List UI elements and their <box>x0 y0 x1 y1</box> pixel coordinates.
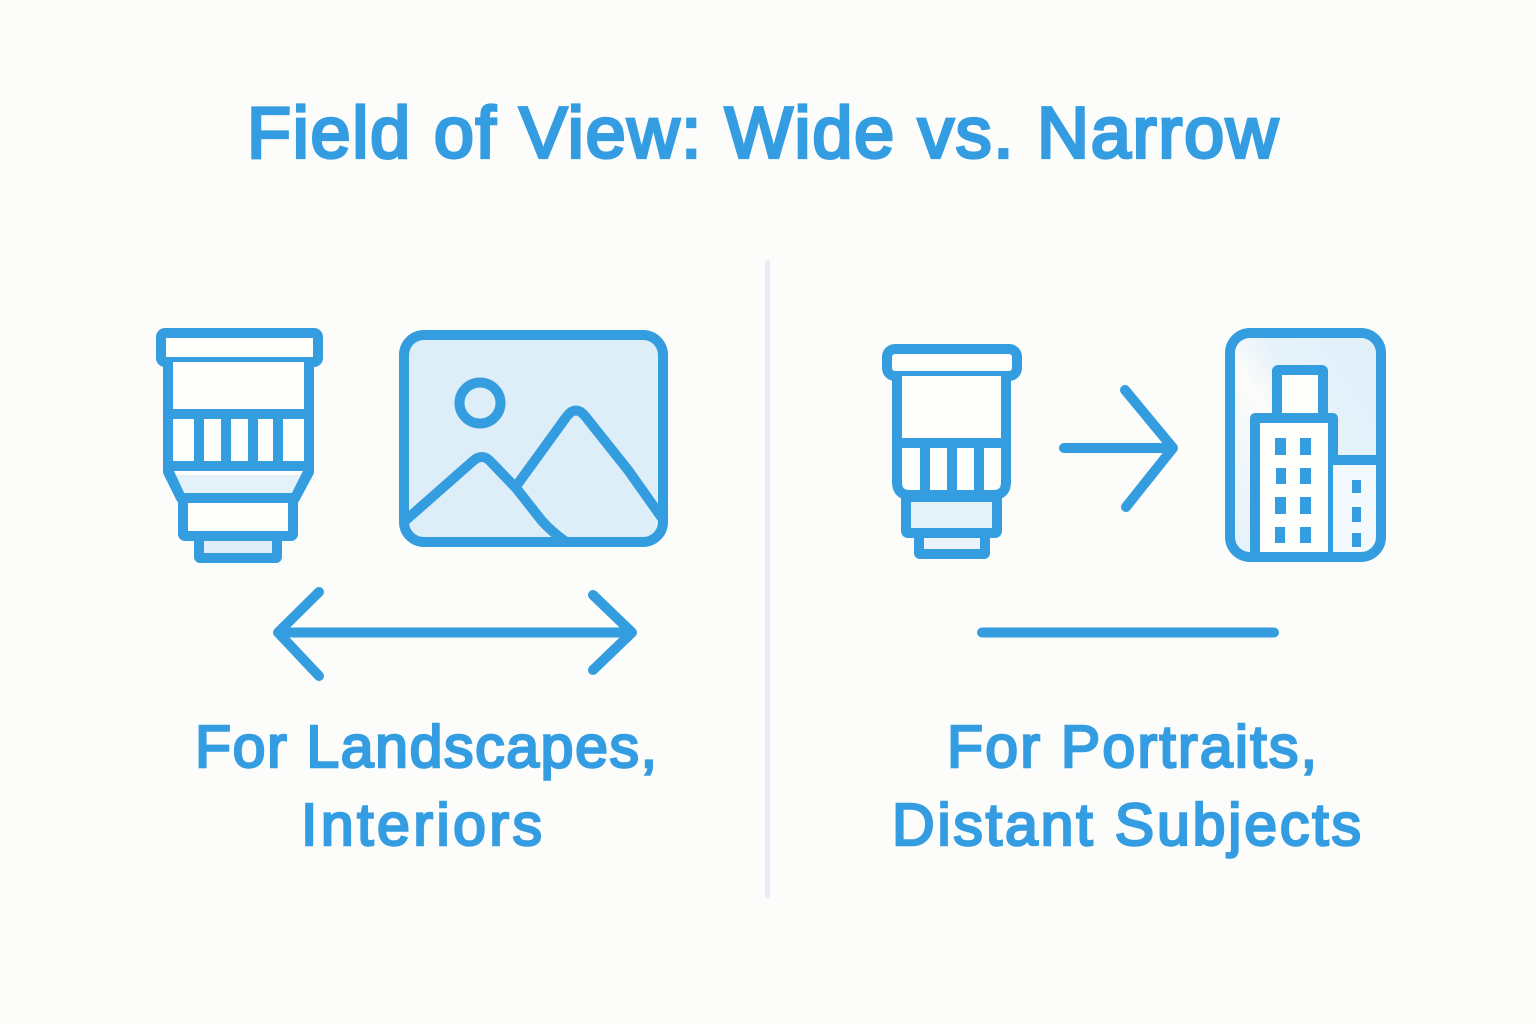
arrow: wide double-headed <box>278 592 632 676</box>
icon: wide-angle lens <box>161 333 318 558</box>
icon: landscape picture <box>404 335 663 542</box>
icon: main building <box>1255 418 1333 557</box>
title: Field of View: Wide vs. Narrow <box>247 94 1279 174</box>
label: wide use cases: For Landscapes, <box>195 714 657 780</box>
divider <box>765 260 770 898</box>
icon: framed buildings <box>1230 333 1381 557</box>
icon: windows <box>1275 438 1361 547</box>
label: wide use cases <box>195 714 657 858</box>
label: wide use cases: Interiors <box>301 792 542 858</box>
icon: picture frame <box>1230 333 1381 557</box>
line: narrow field indicator <box>982 628 1274 638</box>
label: narrow use cases <box>892 714 1361 858</box>
label: narrow use cases: For Portraits, <box>947 714 1317 780</box>
icon: sun <box>460 382 500 424</box>
icon: side building <box>1333 460 1381 557</box>
icon: telephoto lens <box>887 349 1017 554</box>
arrow: narrow pointing to subject <box>1064 390 1173 507</box>
icon: tower <box>1277 370 1323 420</box>
panel: narrow field of view <box>887 333 1381 858</box>
icon: mountains <box>406 410 662 542</box>
label: narrow use cases: Distant Subjects <box>892 792 1361 858</box>
panel: wide field of view <box>161 333 663 858</box>
